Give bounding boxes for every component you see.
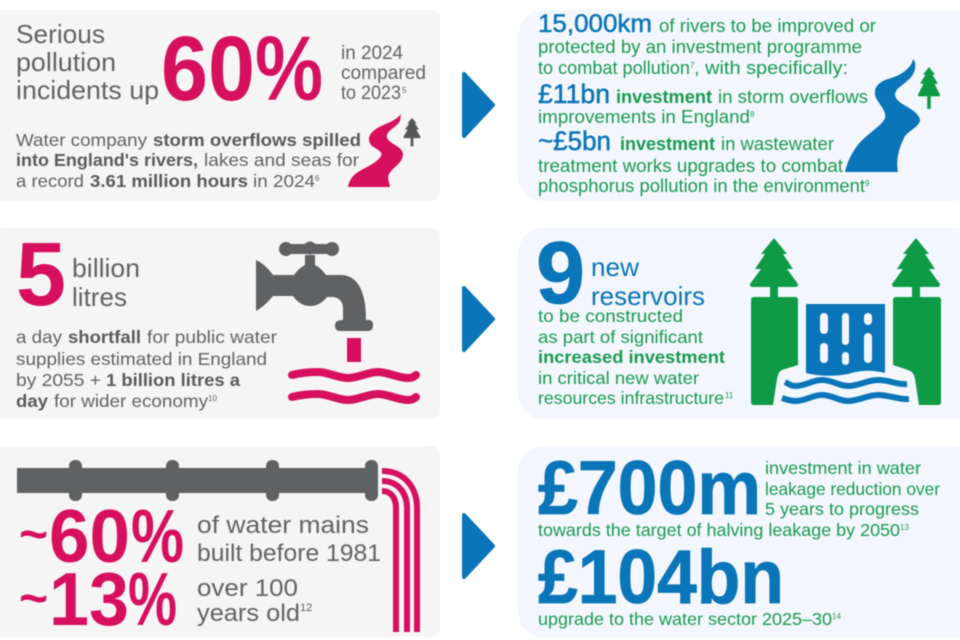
heading: serious pollution incidents — [16, 19, 159, 105]
text: rivers programme: of rivers to be improved or — [659, 16, 876, 36]
arrow: row 2 — [464, 288, 493, 350]
text: in 2024 compared to 2023: 5 — [402, 86, 407, 95]
stat: 60%: 60 — [161, 18, 255, 120]
panel: water mains — [0, 446, 440, 640]
stat: 60% — [161, 18, 323, 120]
text: storm overflows improvements: 8 — [750, 110, 755, 119]
text: leakage reduction: 13 — [900, 523, 909, 532]
heading: new reservoirs — [591, 252, 705, 311]
icon: pipe — [17, 460, 417, 632]
text: shortfall description: a day — [16, 327, 62, 347]
heading: billion litres: litres — [72, 282, 127, 312]
text: leakage reduction: leakage reduction over — [765, 479, 940, 499]
text: storm overflows — [16, 130, 361, 191]
icon: water drop and waves — [292, 338, 416, 400]
panel: pollution problem — [0, 10, 440, 201]
text: shortfall description: for public water — [147, 327, 277, 347]
stat: ~13%: ~ — [19, 570, 48, 626]
stat: ~60%: ~ — [19, 506, 48, 562]
panel: reservoirs — [518, 223, 960, 419]
text: shortfall description: for wider economy — [54, 391, 208, 411]
text: storm overflows improvements: in storm overflows — [718, 87, 868, 107]
text: leakage reduction: investment in water — [765, 458, 921, 478]
text: leakage reduction: towards the target of halving leakage by 2050 — [538, 520, 900, 540]
panel: leakage investment — [518, 446, 960, 637]
text: water mains age — [197, 512, 381, 627]
text: shortfall description: shortfall — [68, 327, 141, 347]
stat: ~£5bn: ~£5bn — [538, 126, 611, 156]
text: shortfall description: supplies estimated in England — [16, 349, 267, 369]
text: storm overflows improvements: investment — [616, 87, 712, 107]
heading: billion litres: billion — [72, 253, 140, 283]
heading: serious pollution incidents: incidents up — [16, 75, 159, 105]
text: shortfall description: by 2055 + — [16, 370, 101, 390]
text: reservoirs description: 11 — [725, 391, 734, 400]
text: water mains age: 12 — [300, 602, 312, 614]
text: storm overflows: Water company — [16, 130, 147, 150]
text: in 2024 compared to 2023 — [341, 43, 426, 104]
text: wastewater treatment: 9 — [865, 179, 870, 188]
text: storm overflows improvements — [538, 87, 868, 127]
heading: billion litres — [72, 253, 140, 312]
text: shortfall description — [16, 327, 277, 411]
panel: rivers investment — [518, 10, 960, 201]
text: leakage reduction: 5 years to progress — [765, 499, 919, 519]
panel: water shortfall — [0, 225, 440, 419]
text: wastewater treatment: in wastewater — [721, 134, 834, 154]
text: water mains age: of water mains — [197, 512, 369, 539]
text: rivers programme: 7 — [690, 61, 695, 70]
stat: ~13%: % — [128, 557, 177, 640]
text: storm overflows: 6 — [315, 174, 320, 183]
icon: tap — [256, 242, 373, 331]
text: reservoirs description: in critical new water — [538, 368, 699, 388]
text: rivers programme: protected by an investment programme — [538, 37, 862, 57]
text: water mains age: built before 1981 — [197, 540, 381, 567]
text: reservoirs description — [538, 306, 734, 408]
text: in 2024 compared to 2023: in 2024 — [341, 43, 403, 64]
heading: new reservoirs: new — [591, 252, 639, 282]
text: rivers programme: , with specifically: — [694, 58, 848, 78]
text: in 2024 compared to 2023: compared — [341, 63, 426, 84]
heading: new reservoirs: reservoirs — [591, 281, 705, 311]
stat: £104bn: £104bn — [538, 535, 784, 620]
text: storm overflows: in 2024 — [253, 171, 315, 191]
stat: £700m: £700m — [538, 446, 761, 531]
text: storm overflows: lakes and seas for — [204, 150, 359, 170]
text: shortfall description: 10 — [208, 394, 217, 403]
stat: ~13% — [19, 557, 177, 640]
text: upgrade 2025-30: 14 — [832, 612, 841, 621]
heading: serious pollution incidents: pollution — [16, 47, 116, 77]
stat: 15,000km: 15,000km — [538, 10, 652, 38]
stat: £11bn: £11bn — [538, 79, 610, 109]
text: reservoirs description: to be constructed — [538, 306, 683, 326]
stat: 60%: % — [255, 18, 323, 120]
stat: ~13%: 13 — [49, 557, 129, 640]
stat: 5: 5 — [16, 225, 66, 325]
text: reservoirs description: as part of significant — [538, 327, 703, 347]
stat: 9: 9 — [536, 223, 585, 322]
arrow: row 1 — [464, 74, 493, 136]
icon: reservoir dam — [750, 238, 941, 405]
heading: serious pollution incidents: Serious — [16, 19, 105, 49]
text: storm overflows: into England's rivers, — [16, 150, 198, 170]
text: storm overflows improvements: improvements in England — [538, 107, 750, 127]
text: upgrade 2025-30: upgrade to the water sector 2025–30 — [538, 609, 832, 629]
text: wastewater treatment: treatment works upgrades to combat — [538, 156, 843, 176]
text: shortfall description: day — [16, 391, 48, 411]
text: leakage reduction — [538, 458, 940, 540]
text: rivers programme: to combat pollution — [538, 58, 690, 78]
stat: ~60% — [19, 494, 184, 578]
text: wastewater treatment — [538, 134, 870, 196]
text: wastewater treatment: phosphorus pollution in the environment — [538, 176, 865, 196]
text: reservoirs description: increased investment — [538, 347, 725, 367]
icon: magenta river — [348, 114, 403, 187]
text: water mains age: over 100 — [197, 575, 298, 602]
icon: green tree — [918, 67, 940, 109]
text: shortfall description: 1 billion litres a — [106, 370, 240, 390]
text: water mains age: years old — [197, 600, 300, 627]
text: reservoirs description: resources infrastructure — [538, 388, 724, 408]
icon: grey tree — [403, 118, 421, 146]
text: storm overflows: 3.61 million hours — [90, 171, 248, 191]
arrow: row 3 — [464, 515, 493, 577]
stat: ~60%: % — [131, 494, 184, 578]
text: rivers programme — [538, 16, 876, 78]
text: in 2024 compared to 2023: to 2023 — [341, 83, 401, 104]
text: storm overflows: storm overflows spilled — [153, 130, 361, 150]
icon: blue river — [845, 59, 920, 172]
stat: ~60%: 60 — [49, 494, 130, 578]
text: storm overflows: a record — [16, 171, 84, 191]
text: wastewater treatment: investment — [620, 134, 715, 154]
